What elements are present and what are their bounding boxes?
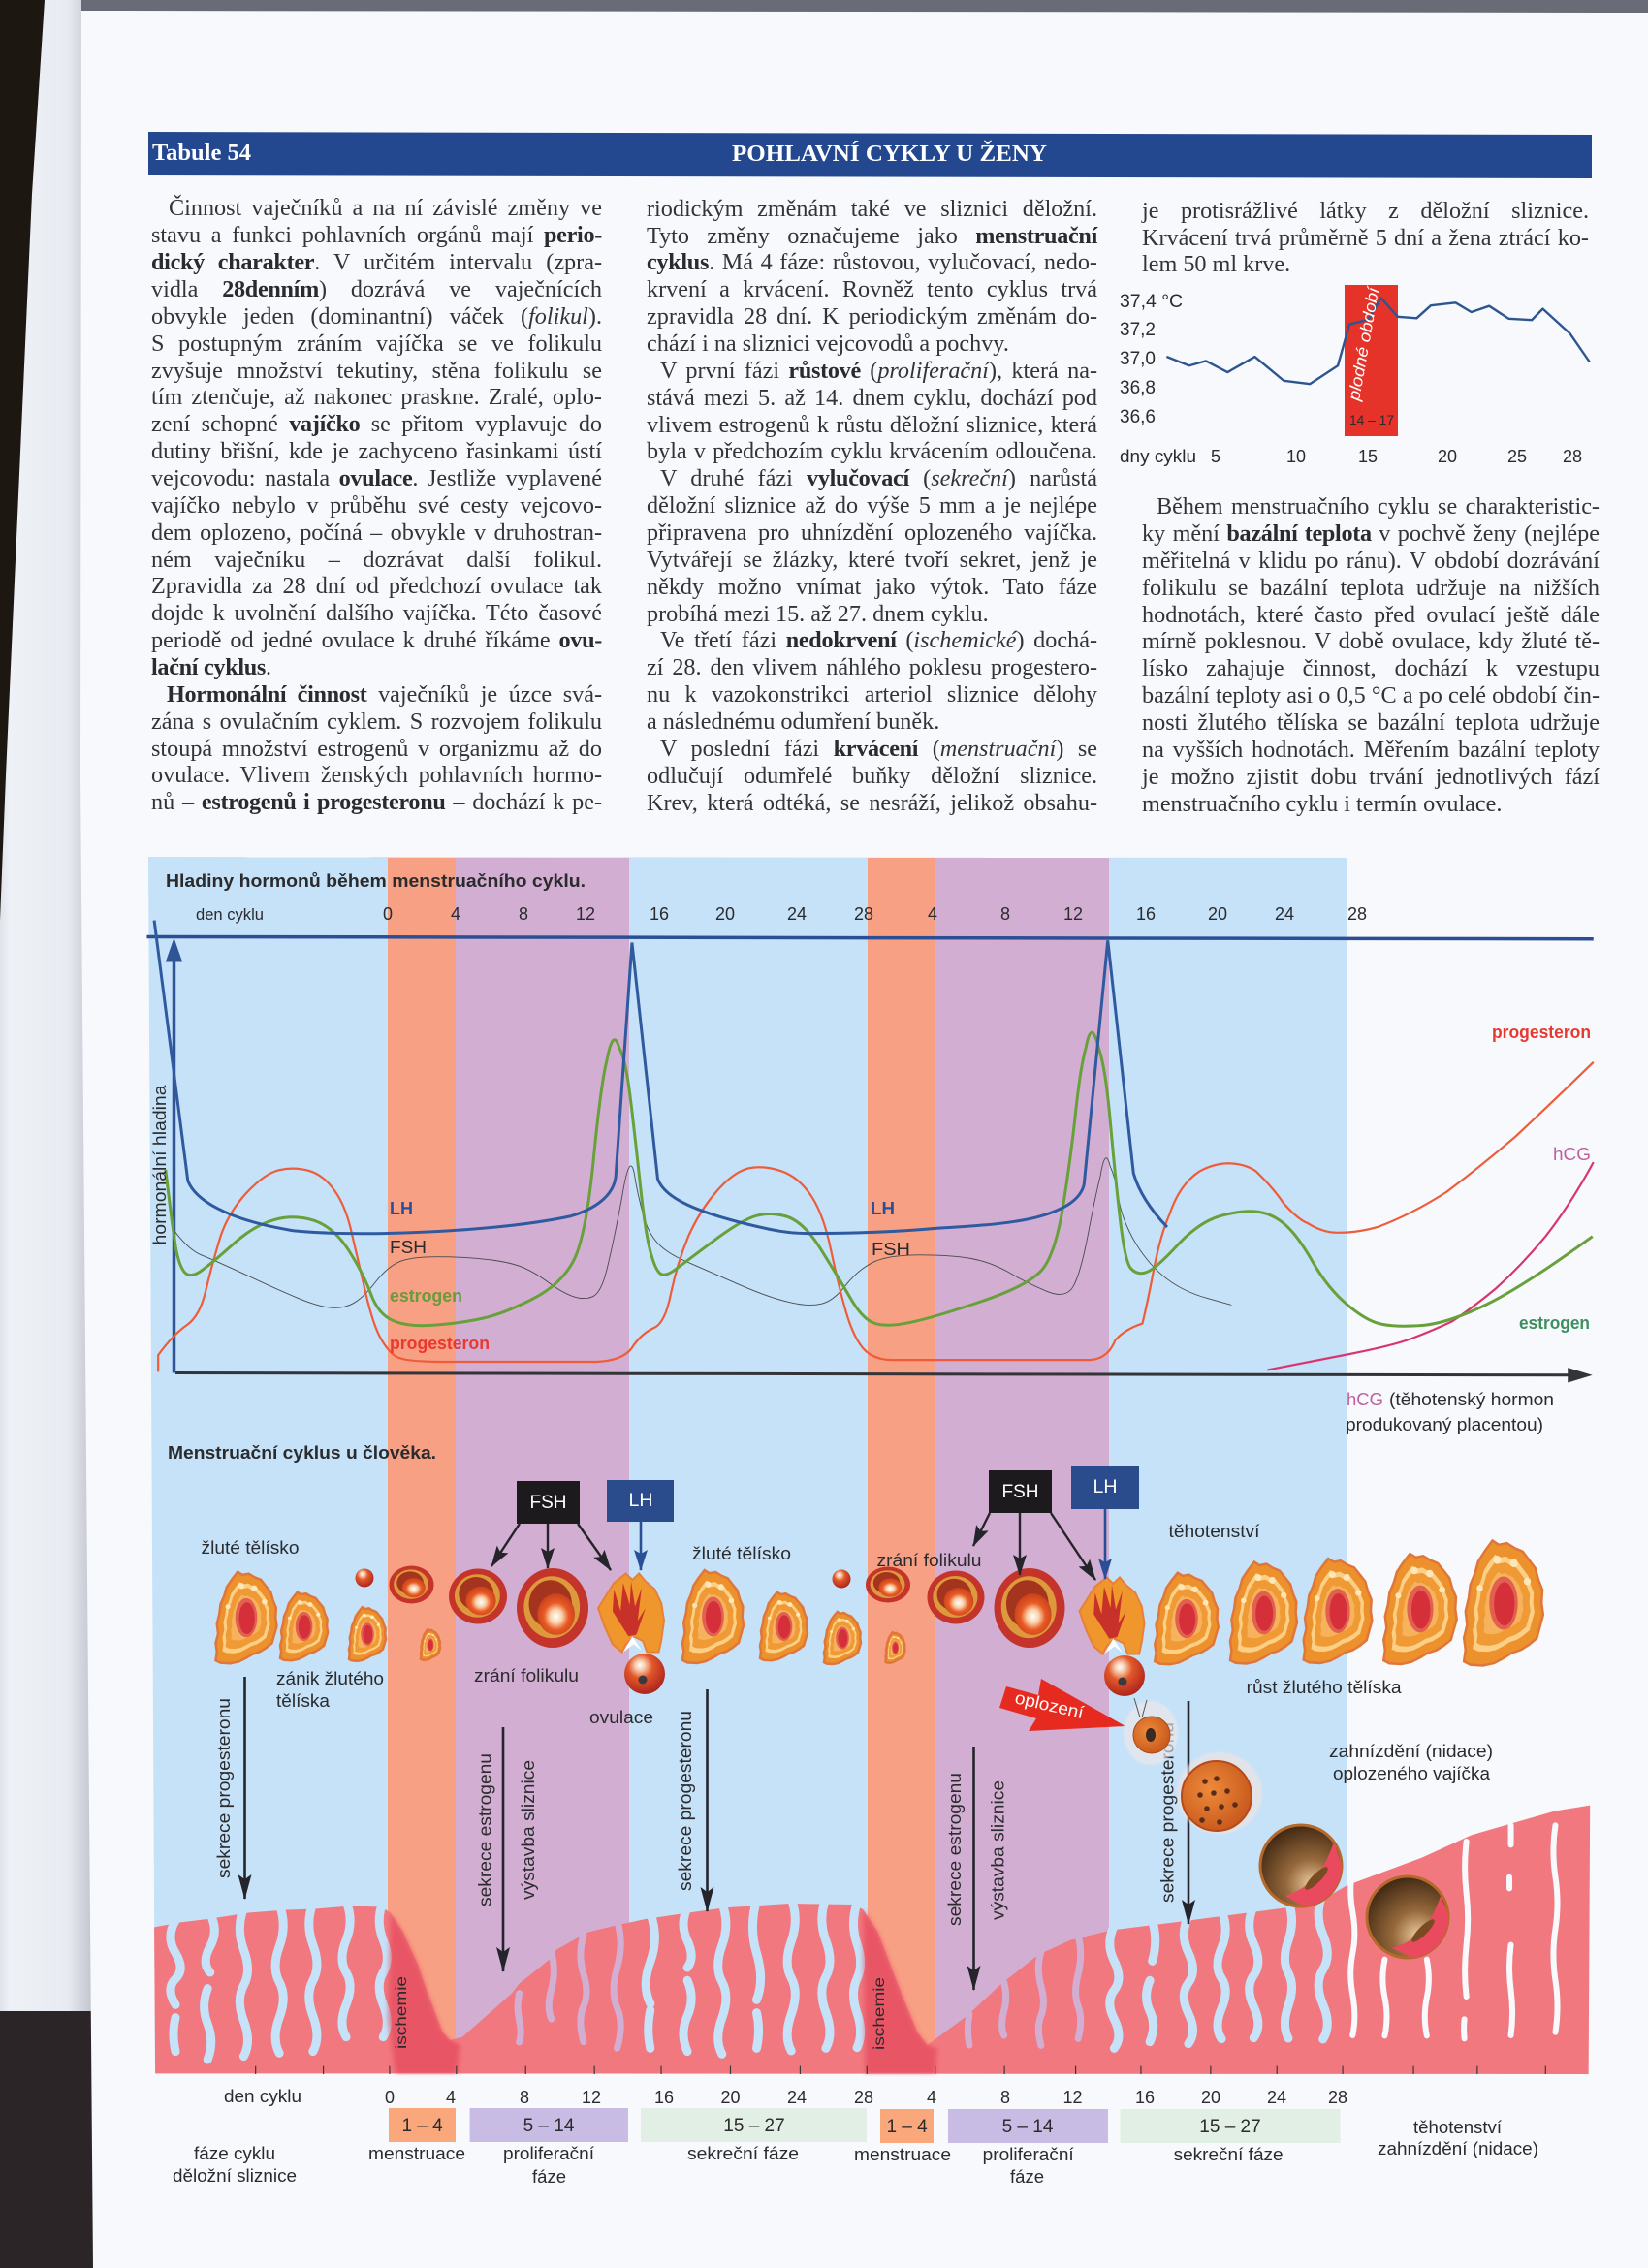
hormone chart [146,870,1594,1434]
progesterone arrow 1 [243,1677,246,1899]
text column 1: ovulace. Vlivem ženských pohlavních hormo- [151,762,602,788]
cycle day axis: 0 [383,904,393,924]
temperature axis labels: 36,8 [1120,378,1156,398]
diagram captions: žluté tělísko [692,1544,791,1563]
ischemia labels: ischemie [872,1977,888,2050]
diagram captions: zrání folikulu [876,1551,981,1570]
text column 3 bottom: nosti žlutého tělíska se bazální teplota udržuje [1142,709,1600,736]
follicle stage 1 [866,1566,910,1603]
main title: POHLAVNÍ CYKLY U ŽENY [732,141,1047,167]
phase names: proliferační [503,2144,594,2163]
text column 1: S postupným zráním vajíčka se ve folikulu [151,331,602,357]
phase names: fáze [1010,2167,1044,2187]
cycle day axis: 28 [1347,904,1367,924]
bottom cycle day axis: 12 [1062,2088,1083,2107]
diagram captions: tělíska [276,1691,331,1711]
bottom cycle day axis: 24 [1267,2088,1286,2107]
ruptured follicle [1080,1578,1144,1654]
diagram captions: ovulace [589,1708,653,1727]
text column 2: odlučují odumřelé buňky děložní sliznice. [647,763,1097,789]
corpus luteum [215,1572,277,1663]
regressing corpus luteum smaller [824,1612,861,1664]
text column 3 top: je protisrážlivé látky z děložní sliznice. [1142,198,1589,224]
text column 3 top: Krvácení trvá průměrně 5 dní a žena ztrácí ko- [1142,225,1589,251]
days axis labels: 15 [1358,447,1378,466]
cycle day axis: 8 [1000,904,1010,924]
ischemia labels: ischemie [394,1976,410,2049]
cycle day axis: 4 [928,904,937,924]
fertilisation arrow [999,1679,1125,1731]
text column 2: Vytvářejí se žlázky, které tvoří sekret, jenž je [647,547,1097,573]
corpus luteum [682,1570,744,1663]
early ovum [832,1570,851,1588]
regressing corpus luteum smaller [349,1607,386,1661]
vertical axis label: hormonální hladina [150,1084,170,1244]
text column 2: byla v předchozím cyklu krvácením odloučena. [647,438,1097,464]
glands in secretory phase [171,1893,1327,2060]
corpus luteum d [1383,1554,1457,1664]
cycle day axis: 24 [787,904,807,924]
temperature axis labels: 36,6 [1120,407,1156,427]
blastocyst landing on mucosa [1260,1825,1342,1906]
phase names: děložní sliznice [173,2166,297,2186]
cycle day axis: 20 [715,904,735,924]
second cycle ovary row [682,1566,1145,1696]
bottom cycle day axis: 0 [385,2088,395,2107]
hCG curve [1268,1162,1594,1370]
text column 2: V poslední fázi krvácení (menstruační) se [660,736,1097,762]
menstrual cycle section title: Menstruační cyklus u člověka. [168,1442,436,1463]
text column 1: zení schopné vajíčko se přitom vyplavuje do [151,411,602,437]
phase names: těhotenství [1413,2118,1502,2137]
LH box first cycle [607,1480,674,1522]
text column 1: stoupá množství estrogenů v organizmu až do [151,736,602,762]
cycle day axis: 4 [451,904,460,924]
follicle stage 3 [517,1568,588,1648]
bottom cycle day axis: 20 [720,2088,741,2107]
proliferative days box [470,2108,628,2142]
FSH box first cycle: FSH [529,1493,566,1513]
fertilisation arrow: oplození [1013,1687,1086,1722]
curve labels: LH [390,1199,413,1218]
vertical secretion labels: sekrece progesteronu [1158,1722,1178,1903]
text column 2: připravena pro uhnízdění oplozeného vajíčka. [647,520,1097,546]
phase names: proliferační [983,2145,1074,2164]
ischemic areas [388,1909,937,2073]
corpus luteum a [1155,1573,1219,1664]
menstruation days box: 1 – 4 [401,2116,443,2136]
diagram captions: zrání folikulu [474,1666,579,1685]
phase names: fáze [532,2167,566,2187]
follicle stage 2 [449,1568,507,1624]
endometrium [154,1806,1590,2074]
progesterone curve [158,1062,1594,1371]
diagram captions: žluté tělísko [202,1538,299,1558]
scanner background sheet [0,0,97,2268]
text column 3 bottom: je možno zjistit dobu trvání jednotlivých fází [1142,764,1600,790]
FSH box second cycle [989,1470,1052,1513]
estrogen arrow 1 [502,1727,504,1971]
text column 2: riodickým změnám také ve sliznici děložní. [647,196,1097,222]
phase names: sekreční fáze [687,2144,799,2163]
days axis labels: 5 [1211,447,1220,466]
days axis labels: 28 [1563,447,1582,466]
vertical axis [166,938,182,1372]
proliferative days box: 5 – 14 [523,2116,575,2136]
released ovum [624,1654,665,1694]
cycle day axis [196,904,1367,924]
days axis labels: 10 [1286,447,1306,466]
heading bar [148,132,1592,178]
FSH curve [173,1158,1231,1307]
text column 3 bottom: Během menstruačního cyklu se charakteristic- [1157,493,1600,520]
bottom cycle day axis: 4 [927,2088,936,2107]
secretory days box 2: 15 – 27 [1199,2117,1261,2137]
text column 2: chází i na sliznici vejcovodů a pochvy. [647,331,1009,357]
text column 2: Tyto změny označujeme jako menstruační [647,223,1097,249]
fertile period bar [1345,285,1398,436]
menstruation days box 2: 1 – 4 [886,2117,928,2137]
corpus luteum b [1230,1562,1297,1663]
text column 2: někdy možno vnímat jako výtok. Tato fáze [647,574,1097,600]
bottom cycle day axis: 20 [1201,2088,1220,2107]
text column 1: periodě od jedné ovulace k druhé říkáme ovu- [151,627,602,653]
text column 3 bottom: bazální teploty asi o 0,5 °C a po celé období čin- [1142,682,1600,709]
curve labels: estrogen [1519,1313,1590,1333]
morula [1177,1752,1262,1834]
LH curve [154,921,1167,1234]
phase boxes [389,2108,1340,2143]
cycle day axis: 8 [519,904,528,924]
top line [146,936,1594,939]
follicle stage 1 [390,1566,434,1603]
mucosa body [154,1806,1590,2074]
text column 1: stavu a funkci pohlavních orgánů mají perio- [151,222,602,248]
text column 1: vidla 28denním) dozrává ve vaječnících [151,276,602,302]
text column 2: probíhá mezi 15. až 27. dnem cyklu. [647,601,989,627]
text column 2: vlivem estrogenů k růstu děložní sliznice, která [647,412,1097,438]
cycle day axis: den cyklu [196,905,264,924]
diagram captions [202,1522,1493,1783]
day ticks [256,2066,1545,2074]
hCG explanation [1346,1390,1554,1434]
fertile period label: plodné období [1345,284,1383,403]
regressing corpus luteum [760,1592,808,1660]
text column 3 bottom: ky mění bazální teplota v pochvě ženy (nejlépe [1142,520,1600,547]
text column 1: zána s ovulačním cyklem. S rozvojem folikulu [151,709,602,735]
bottom cycle day axis: 4 [446,2088,456,2107]
chart title: Hladiny hormonů během menstruačního cyklu. [166,870,586,891]
ruptured follicle [598,1574,664,1652]
fertile days: 14 – 17 [1349,412,1394,427]
days axis labels: dny cyklu [1120,447,1196,466]
corpus luteum e [1464,1541,1543,1665]
text column 2 [647,196,1098,816]
phase names: sekreční fáze [1174,2145,1284,2164]
FSH box first cycle [517,1481,580,1524]
text column 3 bottom: folikulu se bazální teplota udržuje na nižších [1142,575,1600,601]
text column 2: a následnému odumření buněk. [647,709,939,735]
text column 3 bottom: menstruačního cyklu i termín ovulace. [1142,791,1502,817]
curves and axes [146,921,1594,1382]
days axis labels [1120,447,1582,466]
curve labels: FSH [872,1240,910,1259]
text column 3 bottom [1141,493,1600,817]
bottom cycle day axis: 8 [1000,2088,1010,2107]
first cycle ovary row [215,1566,665,1694]
ischemia labels [394,1976,888,2050]
LH box second cycle: LH [1093,1477,1117,1497]
regressing corpus luteum [280,1592,328,1660]
vertical secretion labels: výstavba sliznice [519,1760,538,1900]
phase names: menstruace [854,2145,951,2164]
vertical secretion labels: sekrece estrogenu [475,1753,494,1906]
text column 1: vejcovodu: nastala ovulace. Jestliže vyplavené [151,465,602,491]
curve labels: progesteron [1492,1023,1591,1042]
text column 3 bottom: měřitelná v klidu po ránu). V období dozrávání [1142,548,1600,574]
progesterone arrow 3 [1188,1701,1189,1924]
temperature axis labels [1120,292,1183,427]
FSH arrows second cycle [973,1513,1095,1580]
secretion arrows [244,1677,1188,1990]
text column 2: Ve třetí fázi nedokrvení (ischemické) dochá- [660,627,1097,653]
early ovum [355,1568,374,1588]
growing corpus luteum row [1155,1541,1543,1665]
glands in pregnancy [1350,1825,1558,2038]
text column 2: nu k vazokonstrikci arteriol sliznice dělohy [647,681,1097,708]
text column 1: Činnost vaječníků a na ní závislé změny ve [169,195,602,221]
basal temperature chart [1120,284,1590,466]
text column 2: cyklus. Má 4 fáze: růstovou, vylučovací, nedo- [647,249,1097,275]
text column 2: krvení a krvácení. Rovněž tento cyklus trvá [647,276,1097,302]
cycle day axis: 16 [650,904,669,924]
phase names: menstruace [368,2144,465,2163]
text column 3 bottom: lísko zahajuje činnost, dochází k vzestupu [1142,655,1600,681]
diagram captions: těhotenství [1169,1522,1260,1541]
curve labels: FSH [390,1238,427,1257]
corpus luteum c [1304,1559,1372,1663]
estrogen curve [166,1032,1593,1326]
corpus albicans [886,1632,905,1663]
days axis labels: 25 [1507,447,1527,466]
text column 1: Hormonální činnost vaječníků je úzce svá- [167,681,602,708]
blastocyst implanted in mucosa [1367,1876,1448,1958]
bottom cycle day axis: 8 [520,2088,529,2107]
text column 2: děložní sliznice až do výše 5 mm a je nejlépe [647,492,1097,519]
text column 1: zvyšuje množství tekutiny, stěna folikulu se [151,358,602,384]
text column 1: dem oplozeno, počíná – obvykle v druhostran- [151,520,602,546]
text column 3 bottom: mírně poklesnou. V době ovulace, kdy žluté tě- [1142,628,1600,654]
bottom cycle day axis: den cyklu [224,2087,301,2106]
hCG explanation: hCG [1347,1390,1383,1409]
released ovum [1104,1655,1145,1696]
text column 3 bottom: na vyšších hodnotách. Měřením bazální teploty [1142,737,1600,763]
bottom cycle day axis: 12 [582,2088,601,2107]
diagram captions: zánik žlutého [276,1669,384,1688]
bottom cycle day axis: 16 [654,2088,674,2107]
text column 2: zí 28. den vlivem náhlého poklesu progestero- [647,654,1097,680]
text column 1: lační cyklus. [151,654,271,680]
temperature axis labels: 37,2 [1120,320,1156,340]
vertical secretion labels [214,1698,1178,1926]
diagram captions: oplozeného vajíčka [1333,1764,1491,1783]
diagram captions: růst žlutého tělíska [1247,1678,1403,1697]
bottom cycle day axis [224,2087,1347,2107]
secretory days box: 15 – 27 [723,2116,785,2136]
temperature axis labels: 37,4 °C [1120,292,1183,312]
text column 1: tím ztenčuje, až nakonec praskne. Zralé, oplo- [151,384,602,410]
cycle day axis: 20 [1208,904,1227,924]
plate number: Tabule 54 [152,141,251,166]
curve labels: LH [871,1199,895,1218]
vertical secretion labels: sekrece progesteronu [214,1698,234,1878]
text column 2: stává mezi 5. až 14. dnem cyklu, dochází pod [647,385,1097,411]
follicle stage 3 [995,1568,1064,1648]
text column 1: dutiny břišní, kde je zachyceno řasinkami ústí [151,438,602,464]
hormone boxes and arrows [491,1466,1139,1580]
text column 1: obvykle jeden (dominantní) váček (folikul). [151,303,602,330]
corpus albicans [421,1629,440,1660]
LH arrow first cycle [640,1522,642,1570]
menstruation days box 2 [880,2109,934,2143]
secretory days box [641,2108,867,2142]
text column 3 top: lem 50 ml krve. [1142,251,1290,277]
curve labels: hCG [1553,1145,1591,1164]
cycle phase background bands [148,857,1347,2073]
bottom cycle day axis: 28 [854,2088,873,2107]
horizontal axis [175,1368,1593,1382]
text column 1: Zpravidla za 28 dní od předchozí ovulace tak [151,573,602,599]
vertical secretion labels: sekrece estrogenu [945,1773,965,1926]
curve labels [390,1023,1591,1353]
text column 1: dojde k uvolnění dalšího vajíčka. Této časové [151,600,602,626]
text column 1: dický charakter. V určitém intervalu (zpra- [151,249,602,275]
cycle day axis: 24 [1275,904,1294,924]
text column 3 top [1141,198,1589,277]
cycle day axis: 16 [1136,904,1156,924]
diagram captions: zahnízdění (nidace) [1329,1742,1493,1761]
hCG explanation: (těhotenský hormon [1389,1390,1554,1409]
phase names: fáze cyklu [194,2144,275,2163]
text column 3 bottom: hodnotách, které často před ovulací ještě dále [1142,602,1600,628]
proliferative days box 2: 5 – 14 [1002,2117,1054,2137]
secretory days box 2 [1121,2109,1340,2143]
LH box second cycle [1071,1466,1139,1509]
curve labels: progesteron [390,1334,490,1353]
FSH box second cycle: FSH [1002,1482,1039,1502]
text column 1: vajíčko nebylo v průběhu své cesty vejcovo- [151,492,602,519]
LH arrow second cycle [1104,1509,1106,1579]
cycle day axis: 12 [576,904,595,924]
text column 2: V první fázi růstové (proliferační), která na- [660,358,1097,384]
proliferative days box 2 [948,2109,1108,2143]
estrogen arrow 2 [972,1747,975,1990]
glands in proliferative phase [518,1921,1081,2048]
days axis labels: 20 [1438,447,1457,466]
text column 2: Krev, která odtéká, se nesráží, jelikož obsahu- [647,790,1097,816]
follicle stage 2 [927,1570,985,1624]
cycle day axis: 28 [854,904,873,924]
bottom cycle day axis: 28 [1328,2088,1347,2107]
text column 1 [151,194,602,815]
phase names: zahnízdění (nidace) [1378,2139,1538,2158]
zygote [1124,1698,1178,1765]
text column 1: ném vaječníku – dozrávat další folikul. [151,547,602,573]
cycle day axis: 12 [1063,904,1083,924]
curve labels: estrogen [390,1286,462,1306]
phase names [173,2118,1538,2187]
FSH arrows first cycle [491,1524,611,1570]
vertical secretion labels: výstavba sliznice [989,1780,1008,1920]
bottom cycle day axis: 16 [1135,2088,1155,2107]
temperature axis labels: 37,0 [1120,349,1156,369]
text column 2: V druhé fázi vylučovací (sekreční) narůstá [660,465,1097,491]
menstruation days box [389,2108,456,2142]
temperature line [1166,298,1590,384]
text column 2: zpravidla 28 dní. K periodickým změnám do- [647,303,1097,330]
text column 1: nů – estrogenů i progesteronu – dochází k pe- [151,789,602,815]
bottom cycle day axis: 24 [787,2088,807,2107]
progesterone arrow 2 [706,1689,709,1911]
LH box first cycle: LH [628,1491,653,1511]
vertical secretion labels: sekrece progesteronu [676,1711,695,1891]
hCG explanation: produkovaný placentou) [1346,1415,1543,1434]
